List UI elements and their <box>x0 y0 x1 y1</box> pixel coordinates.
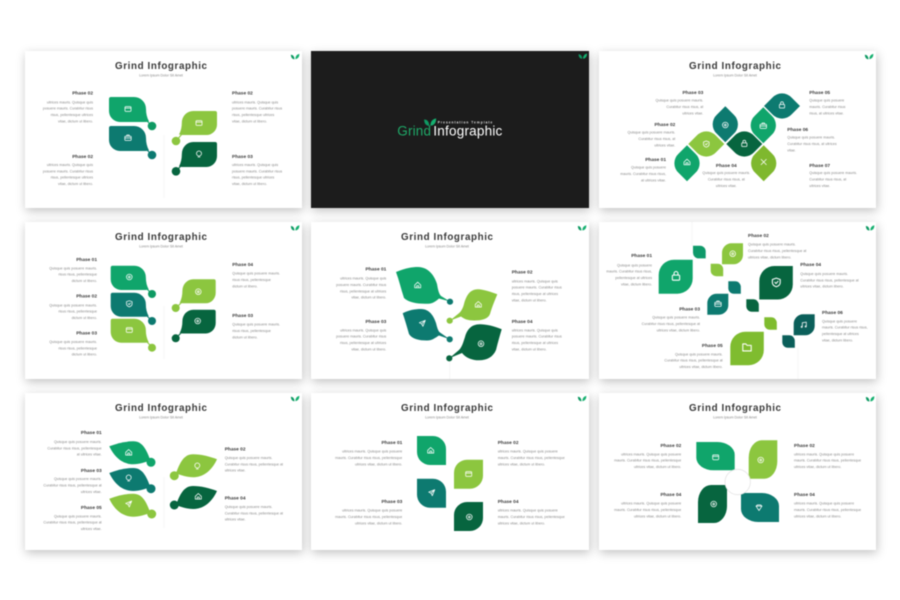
text: phase 01 <box>47 430 102 457</box>
text: phase 05 <box>664 343 723 369</box>
text: phase 03 <box>49 330 97 357</box>
text: phase 04 <box>800 262 859 289</box>
text: phase 01: risus, pellentesque at ultrices <box>340 289 387 293</box>
text: phase 04: ultrices vitae, dictum libero. <box>800 285 844 289</box>
text: phase 01: at ultrices vitae. <box>641 178 666 182</box>
text: phase 03: ultrices vitae. <box>81 490 102 494</box>
text: upper right: ultrices vitae, dictum ut libero. <box>794 465 841 469</box>
text: phase 04: Phase 04 <box>232 262 253 268</box>
leaf: phase 01 <box>109 441 156 467</box>
text: lower left: ultrices mauris. Quisque quis posuere <box>621 502 681 506</box>
heading <box>401 403 494 420</box>
text: phase 01: Quisque quis posuere <box>617 263 652 267</box>
leaf: lime <box>749 440 777 479</box>
leaf: phase 02 <box>688 131 724 157</box>
text: phase 03: risus, pellentesque at ultrices <box>340 341 387 345</box>
text: phase 01: posuere mauris. Curabitur risus <box>336 283 386 287</box>
text: phase 03: Phase 03 <box>679 306 700 312</box>
text: lower left <box>614 492 682 518</box>
leaf: green <box>696 442 735 470</box>
panel: slide 1 two-by-two speech leaves <box>25 51 302 208</box>
text: phase 05 <box>43 505 102 531</box>
leaf: phase 01 <box>417 436 446 465</box>
text: phase 05: Quisque quis posuere mauris. <box>675 352 723 356</box>
leaf: phase 02 <box>111 293 156 325</box>
text: phase 02: Phase 02 <box>512 270 533 276</box>
text: phase 01: vitae, dictum ut libero. <box>351 296 386 300</box>
text: phase upper left: ultrices mauris. Quisque quis <box>47 100 93 104</box>
text: phase 03: Quisque quis posuere mauris. <box>652 316 700 320</box>
leaf: small dark <box>746 299 759 312</box>
text: phase 02: vitae, dictum ut libero. <box>512 298 547 302</box>
text: phase 02 <box>498 440 565 466</box>
leaf: small lime lower <box>764 317 777 330</box>
leaf: phase 03 <box>417 479 446 508</box>
text: phase 04: Quisque quis posuere mauris. <box>232 272 280 276</box>
text: phase 05: Quisque quis posuere mauris. <box>232 323 280 327</box>
text: phase 07: Curabitur risus risus, at <box>809 177 846 181</box>
text: phase 01: ultrices vitae, dictum ut libero. <box>355 462 402 466</box>
text: phase 01: risus risus, pellentesque <box>58 273 97 277</box>
text: phase 03: Phase 03 <box>81 468 102 474</box>
text: phase 07: Quisque quis posuere mauris. <box>809 171 857 175</box>
panel: slide 3 diamond chain <box>599 51 876 208</box>
leaf: dark green <box>172 142 217 176</box>
text: phase 05: Phase 05 <box>702 343 723 349</box>
text: lower left: ultrices vitae, dictum ut libero. <box>634 514 681 518</box>
text: phase 02 <box>628 122 676 147</box>
text: phase 05: Curabitur risus risus, pellentesque at <box>43 521 102 525</box>
leaf: small teal <box>728 281 741 294</box>
text: phase 05: risus, at ultrices vitae. <box>809 111 844 115</box>
text: phase 02: Phase 02 <box>654 122 676 128</box>
text: phase 04: dictum ut libero. <box>232 284 258 288</box>
text: upper left <box>614 443 682 469</box>
text: phase 01 <box>620 157 666 182</box>
leaf: phase 04 <box>759 266 793 300</box>
icon: logo <box>291 225 299 230</box>
text: upper right: Phase 02 <box>794 443 815 449</box>
text: phase 06 <box>787 127 837 152</box>
text: phase 02 <box>512 270 562 302</box>
text: upper left: Phase 02 <box>660 443 682 449</box>
text: phase upper right: Phase 02 <box>232 90 253 96</box>
text: phase 02: ultrices vitae, dictum ut libero. <box>498 462 545 466</box>
text: phase 04: ultrices vitae. <box>225 518 246 522</box>
text: phase 01 <box>606 253 652 286</box>
leaf: teal <box>741 493 779 522</box>
text: lower right: Phase 04 <box>794 492 815 498</box>
text: phase 02: ultrices vitae. <box>654 143 675 147</box>
text: phase 03: Curabitur risus risus, pellentesque at <box>43 484 102 488</box>
text: phase 03 <box>656 90 704 115</box>
leaf: teal <box>109 126 156 159</box>
text: phase 03: Quisque quis posuere mauris. <box>54 477 102 481</box>
leaf: phase 04 <box>172 279 216 312</box>
leaf: small deep teal <box>782 335 795 348</box>
text: phase 02: risus risus, pellentesque <box>58 310 97 314</box>
text: phase 01: Phase 01 <box>76 257 97 263</box>
leaf: phase 03 <box>713 106 738 142</box>
text: phase 03: ultrices mauris. Quisque quis posuere <box>342 509 402 513</box>
panel: slide 5 organic leaves <box>311 222 589 379</box>
text: phase 03 <box>335 499 403 526</box>
text: phase 01: pellentesque at ultrices <box>615 276 652 280</box>
leaf: phase 05 <box>172 310 216 342</box>
text: phase 01: Phase 01 <box>81 430 102 436</box>
text: phase 01: mauris. Curabitur risus risus, pellentesque <box>335 456 402 460</box>
text: phase lower left <box>43 154 93 186</box>
text: phase 04: Phase 04 <box>498 499 519 505</box>
heading <box>115 232 208 249</box>
icon: logo <box>578 396 586 401</box>
text: lower left: Phase 04 <box>660 492 682 498</box>
leaf: phase 04 <box>170 486 217 510</box>
text: phase 03: Phase 03 <box>682 90 704 96</box>
leaf: small lime <box>711 264 723 276</box>
leaf: phase 03 <box>111 319 156 352</box>
icon: logo <box>291 54 299 59</box>
text: phase 02: Phase 02 <box>76 294 97 300</box>
icon: logo <box>578 225 586 230</box>
icon: logo <box>866 225 874 230</box>
text: phase 07 <box>809 163 857 188</box>
text: phase 04: Quisque quis posuere mauris. <box>702 171 750 175</box>
text: phase 04: ultrices vitae. <box>716 184 737 188</box>
text: phase 06: Quisque quis posuere mauris. <box>787 136 835 140</box>
text: phase 01: Phase 01 <box>631 253 652 259</box>
leaf: phase 06 <box>751 107 776 143</box>
text: cover title white: Infographic <box>433 124 503 138</box>
text: phase 03: ultrices vitae, dictum ut libero. <box>355 522 402 526</box>
text: phase 03: Curabitur risus risus, pellentesque at <box>642 322 700 326</box>
text: phase 06: Quisque quis posuere <box>822 319 857 323</box>
text: phase 02: ultrices mauris. Quisque quis posuere <box>498 450 558 454</box>
text: phase 01: Phase 01 <box>645 157 666 163</box>
text: phase 02: risus, pellentesque at ultrices <box>512 292 558 296</box>
text: phase lower right: vitae, dictum ut libero. <box>232 182 267 186</box>
text: phase 04: Quisque quis posuere mauris. <box>225 505 272 509</box>
leaf: phase 02 <box>722 243 743 264</box>
text: phase lower left: Phase 02 <box>72 154 93 160</box>
text: phase 02: ultrices vitae. <box>225 469 246 473</box>
text: phase 04: ultrices mauris. Quisque quis <box>512 328 558 332</box>
text: phase 02: Phase 02 <box>748 233 769 239</box>
text: phase 06: Phase 06 <box>787 127 808 133</box>
text: phase 04 <box>232 262 280 288</box>
text: phase 04: Curabitur risus risus, pellentesque at <box>225 511 283 515</box>
panel: slide 9 pinwheel <box>599 393 876 550</box>
leaf: phase 05 <box>764 93 800 119</box>
text: phase 04: ultrices mauris. Quisque quis posuere <box>498 509 558 513</box>
leaf: phase 02 <box>447 289 497 324</box>
leaf: phase 04 <box>726 131 762 157</box>
panel: slide 8 staggered leaves <box>311 393 589 550</box>
text: phase lower left: risus, pellentesque ultrices <box>51 176 93 180</box>
text: lower left: mauris. Curabitur risus risus, pellentesque <box>614 508 681 512</box>
leaf: phase 01 <box>396 267 453 305</box>
leaf: phase 01 <box>674 145 700 181</box>
leaf: phase 06 <box>794 314 815 335</box>
text: phase 05: ultrices vitae, dictum libero. <box>679 365 723 369</box>
text: phase 03: ultrices mauris. Quisque quis <box>340 328 387 332</box>
text: phase 04: Quisque quis posuere mauris. <box>800 272 848 276</box>
text: phase 03 <box>642 306 700 332</box>
text: phase 05: Phase 05 <box>81 505 102 511</box>
text: phase 06: vitae, dictum libero. <box>822 338 853 342</box>
text: phase 07: ultrices vitae. <box>809 184 830 188</box>
text: phase 04: vitae, dictum ut libero. <box>512 347 547 351</box>
leaf: phase 01 <box>659 260 693 294</box>
text: phase 02: mauris. Curabitur risus risus, pellentesque <box>498 456 565 460</box>
text: phase 03: Phase 03 <box>381 499 403 505</box>
text: phase 03: mauris. Curabitur risus risus, pellentesque <box>335 515 402 519</box>
text: phase 01: Quisque quis posuere <box>631 166 666 170</box>
heading <box>401 232 494 249</box>
text: phase upper right: posuere mauris. Curabitur risus <box>232 107 282 111</box>
leaf: phase 02 <box>170 454 217 480</box>
text: phase lower left: posuere mauris. Curabitur risus <box>43 169 93 173</box>
text: phase lower right: ultrices mauris. Quisque quis <box>232 163 278 167</box>
text: phase 01: ultrices mauris. Quisque quis posuere <box>342 450 402 454</box>
text: phase 04 <box>498 499 565 526</box>
leaf: phase 03 <box>403 309 453 342</box>
text: phase 05: Curabitur risus risus, pellentesque at <box>664 359 723 363</box>
text: lower right: ultrices mauris. Quisque quis posuere <box>794 502 854 506</box>
text: phase 03: Phase 03 <box>76 330 97 336</box>
text: phase 05 <box>232 313 280 339</box>
text: upper left: ultrices mauris. Quisque quis posuere <box>621 452 681 456</box>
panel: slide 7 wavy leaves with dots <box>25 393 302 550</box>
text: lower right <box>794 492 861 518</box>
text: phase 03: Quisque quis posuere mauris. <box>656 99 703 103</box>
text: phase 01: mauris. Curabitur risus risus, <box>606 270 652 274</box>
text: phase 04: Phase 04 <box>512 319 533 325</box>
text: phase 04: Phase 04 <box>225 496 246 502</box>
text: lower right: ultrices vitae, dictum ut libero. <box>794 514 841 518</box>
text: phase 06: Phase 06 <box>822 310 843 316</box>
text: phase 04 <box>702 163 750 188</box>
text: phase 06: pellentesque at ultrices <box>822 332 859 336</box>
text: phase lower right: risus, pellentesque ultrices <box>232 176 275 180</box>
text: phase 03: vitae, dictum ut libero. <box>351 347 386 351</box>
text: phase lower right: posuere mauris. Curabitur risus <box>232 169 282 173</box>
text: phase 03: ultrices vitae, dictum libero. <box>657 328 700 332</box>
text: phase 01 <box>49 257 97 283</box>
text: phase 03: Curabitur risus risus, at <box>666 105 703 109</box>
text: phase upper right: ultrices mauris. Quisque quis <box>232 100 278 104</box>
leaf: green <box>109 97 156 130</box>
text: phase 03: ultrices vitae. <box>682 111 703 115</box>
text: phase 04: risus, pellentesque at ultrices <box>512 341 558 345</box>
text: phase 02: Curabitur risus risus, at <box>638 137 675 141</box>
text: phase 04: Phase 04 <box>716 163 737 169</box>
panel: slide 4 five speech leaves <box>25 222 302 379</box>
text: phase upper left: vitae, dictum ut libero. <box>58 119 93 123</box>
text: phase upper left: Phase 02 <box>72 90 93 96</box>
leaf: phase 05 <box>109 494 156 518</box>
text: phase upper right: vitae, dictum ut libero. <box>232 119 267 123</box>
text: phase 03: dictum ut libero. <box>72 353 97 357</box>
text: phase 02: dictum ut libero. <box>72 316 97 320</box>
leaf: phase 07 <box>751 145 776 181</box>
heading <box>115 403 208 420</box>
icon: logo <box>866 396 874 402</box>
text: phase upper right <box>232 90 282 123</box>
leaf: phase 03 <box>109 468 156 493</box>
panel: slide 2 dark cover <box>311 51 589 208</box>
text: phase 02 <box>748 233 806 259</box>
text: phase 03: Phase 03 <box>365 319 387 325</box>
text: phase 06: Curabitur risus risus, at ultrices <box>787 142 837 146</box>
text: phase 05: Quisque quis posuere <box>809 99 844 103</box>
leaf: phase 04 <box>454 502 483 531</box>
text: phase 05: Phase 03 <box>232 313 253 319</box>
text: phase 01: Quisque quis posuere mauris. <box>49 266 97 270</box>
text: phase upper right: risus, pellentesque ultrices <box>232 113 275 117</box>
icon: logo <box>578 54 587 59</box>
text: phase 02: posuere mauris. Curabitur risus <box>512 286 562 290</box>
text: phase upper left <box>43 90 93 123</box>
text: phase 01 <box>335 440 403 466</box>
text: phase 04: posuere mauris. Curabitur risus <box>512 335 562 339</box>
text: phase 01: Phase 01 <box>365 266 387 272</box>
text: phase 02 <box>225 446 283 473</box>
text: phase lower left: vitae, dictum ut libero. <box>58 182 93 186</box>
text: phase 01: Curabitur risus risus, pellentesque <box>47 446 102 450</box>
leaf: lime <box>172 111 217 145</box>
text: phase 02: Quisque quis posuere mauris. <box>49 303 97 307</box>
text: phase 02: ultrices vitae, dictum libero. <box>748 255 791 259</box>
text: lower right: mauris. Curabitur risus risus, pellentesque <box>794 508 861 512</box>
text: phase 04 <box>512 319 562 351</box>
text: phase 02 <box>49 294 97 320</box>
text: upper right <box>794 443 861 469</box>
text: phase 05 <box>809 90 846 115</box>
text: phase lower right <box>232 154 282 186</box>
text: phase 04: Curabitur risus risus, at <box>708 177 745 181</box>
heading <box>689 61 782 78</box>
text: phase lower left: ultrices mauris. Quisque quis <box>47 163 93 167</box>
circle: hub <box>725 469 750 495</box>
text: phase 04: ultrices vitae, dictum ut libero. <box>498 522 545 526</box>
text: phase 02: Phase 02 <box>225 446 246 452</box>
text: upper right: ultrices mauris. Quisque quis posuere <box>794 452 854 456</box>
text: phase 05: mauris. Curabitur risus <box>809 105 846 109</box>
text: phase 02: Curabitur risus risus, pellentesque at <box>748 249 806 253</box>
text: phase 02: ultrices mauris. Quisque quis <box>512 279 558 283</box>
text: phase 01 <box>336 266 387 300</box>
text: phase 06: mauris. Curabitur risus risus, <box>822 326 868 330</box>
text: phase upper left: risus, pellentesque ultrices <box>51 113 93 117</box>
leaf: phase 02 <box>454 460 483 489</box>
text: phase 03 <box>336 319 387 351</box>
leaf: small green <box>693 246 706 258</box>
text: phase 04 <box>225 496 283 522</box>
text: phase 01: mauris. Curabitur risus risus, <box>620 172 666 176</box>
text: phase 01: at ultrices vitae. <box>77 453 102 457</box>
leaf: phase 03 <box>707 294 728 315</box>
text: phase 01: Phase 01 <box>381 440 403 446</box>
text: phase 04: risus risus, pellentesque <box>232 278 271 282</box>
icon: logo <box>865 54 873 59</box>
text: phase 04: Phase 04 <box>800 262 821 268</box>
leaf: phase 04 <box>446 324 502 361</box>
text: phase 06 <box>822 310 868 342</box>
text: upper right: mauris. Curabitur risus risus, pellentesque <box>794 459 861 463</box>
text: phase 02: Quisque quis posuere mauris. <box>225 456 272 460</box>
text: cover title green: Grind <box>397 124 431 138</box>
text: phase 02: Curabitur risus risus, pellentesque at <box>225 462 283 466</box>
text: phase 04: mauris. Curabitur risus risus, pellentesque <box>498 515 565 519</box>
text: upper left: mauris. Curabitur risus risus, pellentesque <box>614 459 681 463</box>
icon: logo <box>291 396 299 401</box>
text: phase 07: Phase 07 <box>809 163 830 169</box>
text: upper left: ultrices vitae, dictum ut libero. <box>634 465 681 469</box>
text: presentation template: Presentation Template <box>438 120 493 124</box>
text: phase 02: Phase 02 <box>498 440 519 446</box>
text: phase 05: dictum ut libero. <box>232 335 258 339</box>
heading <box>689 403 782 420</box>
panel: slide 6 scattered leaves <box>599 222 876 379</box>
heading <box>115 61 208 78</box>
text: phase 02: Quisque quis posuere mauris. <box>748 243 796 247</box>
text: phase upper left: posuere mauris. Curabitur risus <box>43 107 93 111</box>
text: phase 02: Quisque quis posuere mauris. <box>628 131 675 135</box>
text: phase 01: Quisque quis posuere mauris. <box>54 440 102 444</box>
text: phase 05: risus risus, pellentesque <box>232 329 271 333</box>
text: phase 06: vitae. <box>787 148 796 152</box>
text: phase 01: dictum ut libero. <box>72 279 97 283</box>
text: phase 05: ultrices vitae. <box>81 527 102 531</box>
text: phase lower right: Phase 03 <box>232 154 253 160</box>
leaf: phase 05 <box>730 332 764 365</box>
leaf: dark green <box>698 485 727 523</box>
text: phase 03: Quisque quis posuere mauris. <box>49 340 97 344</box>
text: phase 05: Quisque quis posuere mauris. <box>54 514 102 518</box>
icon: cover leaves <box>424 118 436 126</box>
text: phase 05: Phase 05 <box>809 90 830 96</box>
text: phase 03 <box>43 468 102 494</box>
text: phase 01: vitae, dictum libero. <box>621 282 652 286</box>
text: phase 01: ultrices mauris. Quisque quis <box>340 277 387 281</box>
text: phase 03: risus risus, pellentesque <box>58 346 97 350</box>
text: phase 03: posuere mauris. Curabitur risus <box>336 335 386 339</box>
leaf: phase 01 <box>111 266 156 298</box>
text: phase 04: Curabitur risus risus, pellentesque at <box>800 278 859 282</box>
